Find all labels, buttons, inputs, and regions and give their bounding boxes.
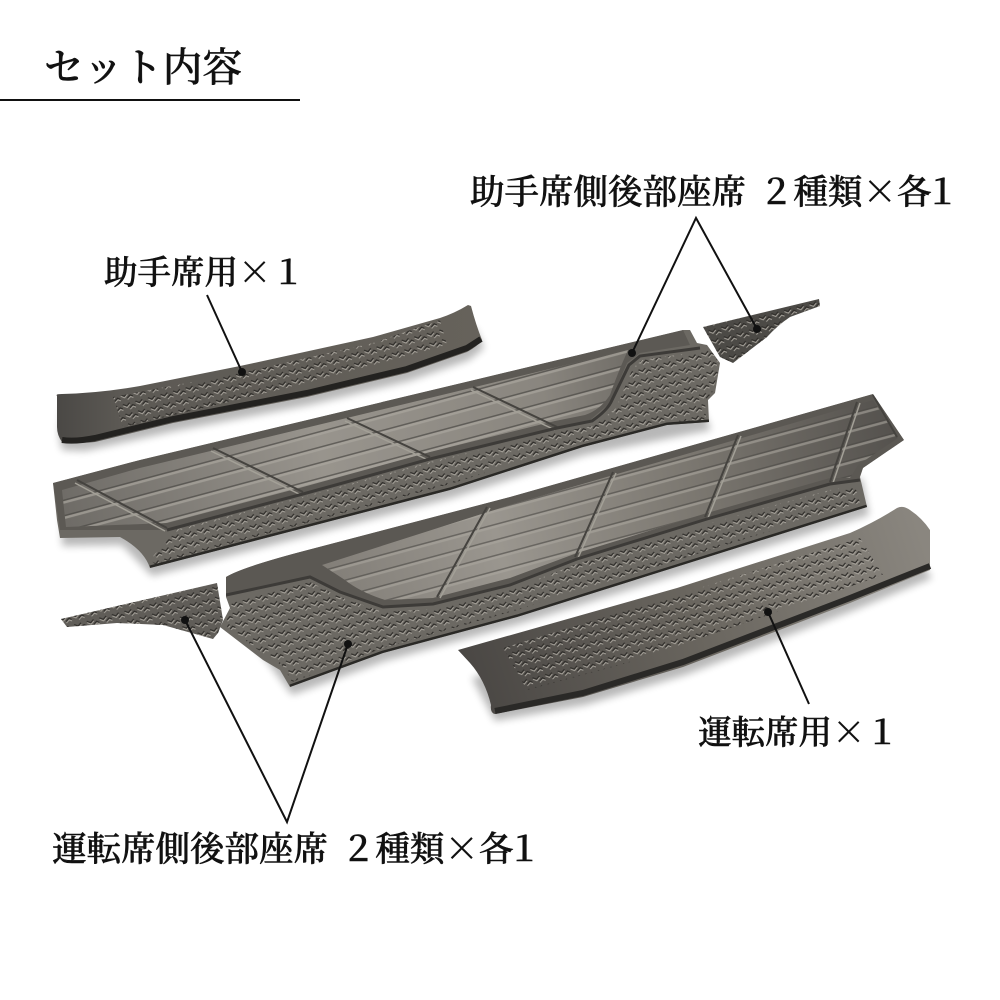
treaded band bbox=[225, 486, 860, 682]
part: driver-side rear sill long plate bbox=[220, 394, 904, 687]
title: セット内容 bbox=[44, 36, 242, 93]
ribbed panel bbox=[53, 330, 700, 531]
label: passenger-side rear: 助手席側後部座席 bbox=[470, 164, 746, 214]
part: passenger seat step plate bbox=[57, 305, 482, 443]
label: passenger-side rear bbox=[470, 164, 960, 357]
part: passenger-side small corner plate bbox=[703, 299, 820, 363]
part: passenger-side rear sill long plate bbox=[53, 330, 720, 568]
label: driver-side rear bbox=[52, 616, 542, 871]
label: passenger seat: 助手席用×１ bbox=[104, 245, 305, 294]
label: driver-side rear: ２種類×各 bbox=[341, 821, 514, 871]
soft shadows under parts bbox=[59, 328, 932, 721]
treaded band bbox=[150, 350, 720, 564]
label: driver-side rear: １ bbox=[507, 821, 542, 871]
label: driver seat: 運転席用×１ bbox=[698, 705, 899, 754]
label: passenger seat bbox=[104, 245, 305, 376]
label: driver-side rear: 運転席側後部座席 bbox=[52, 821, 328, 871]
part: driver seat step plate bbox=[458, 507, 930, 714]
part: driver-side small corner plate bbox=[61, 583, 223, 639]
label: passenger-side rear: ２種類×各 bbox=[759, 164, 932, 214]
label: driver seat bbox=[698, 608, 899, 754]
ribbed panel bbox=[226, 394, 904, 607]
label: passenger-side rear: １ bbox=[925, 164, 960, 214]
